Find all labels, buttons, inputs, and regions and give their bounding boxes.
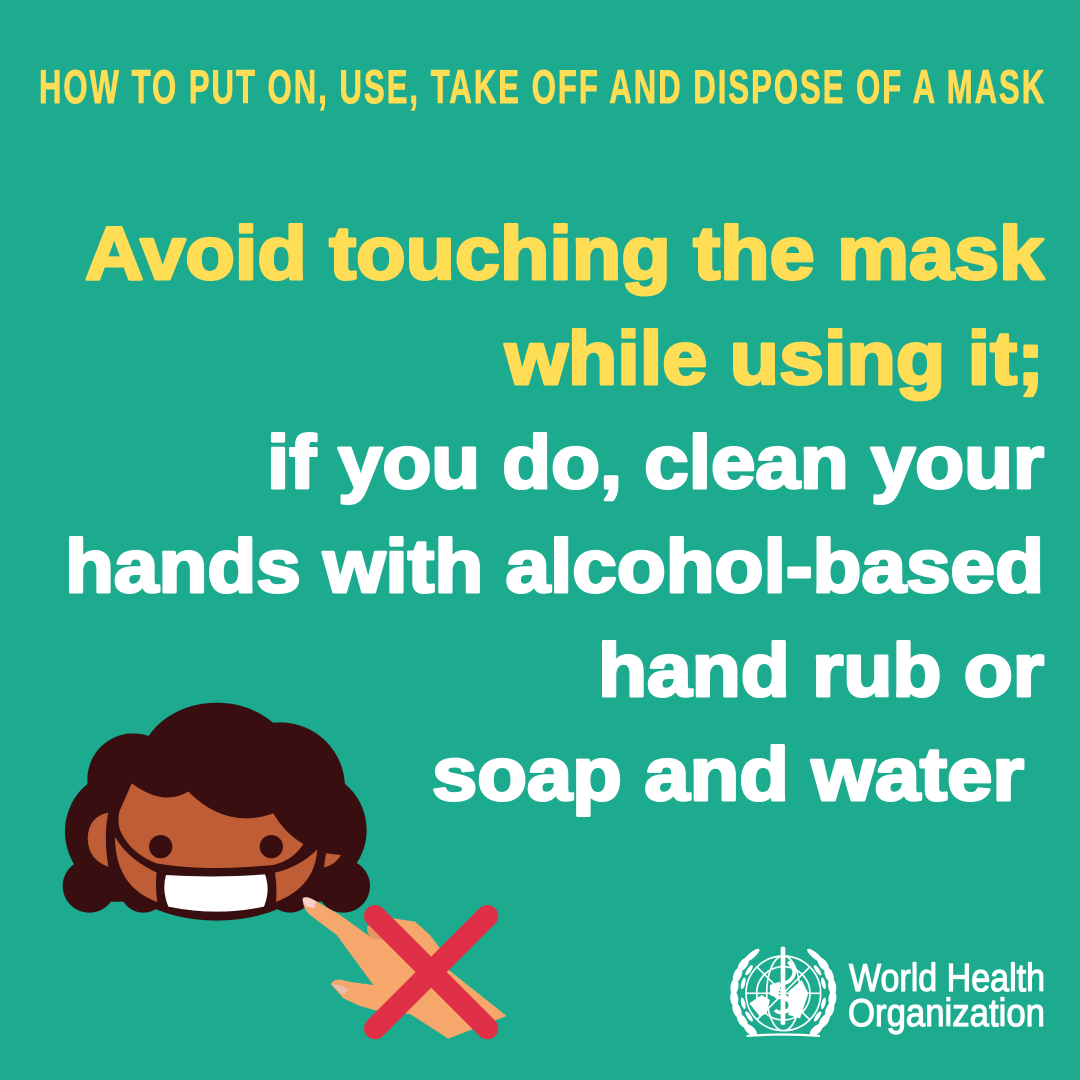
white main message: soap and water	[432, 732, 1024, 816]
white main message	[65, 420, 1044, 816]
emblem	[729, 947, 837, 1038]
white main message: if you do, clean your	[267, 420, 1044, 504]
yellow main message: while using it;	[504, 316, 1044, 400]
icon: woman wearing mask	[63, 703, 370, 921]
organization name: Organization	[848, 992, 1045, 1035]
icon: pointing hand crossed out	[303, 897, 507, 1039]
organization name	[848, 957, 1045, 1035]
organization name: World Health	[849, 957, 1045, 1000]
yellow main message: Avoid touching the mask	[85, 211, 1044, 295]
logo: World Health Organization	[729, 947, 1045, 1038]
white main message: hand rub or	[598, 628, 1044, 712]
header title: HOW TO PUT ON, USE, TAKE OFF AND DISPOSE OF A MASK	[39, 62, 1044, 114]
white main message: hands with alcohol-based	[65, 524, 1044, 608]
yellow main message	[85, 211, 1044, 400]
